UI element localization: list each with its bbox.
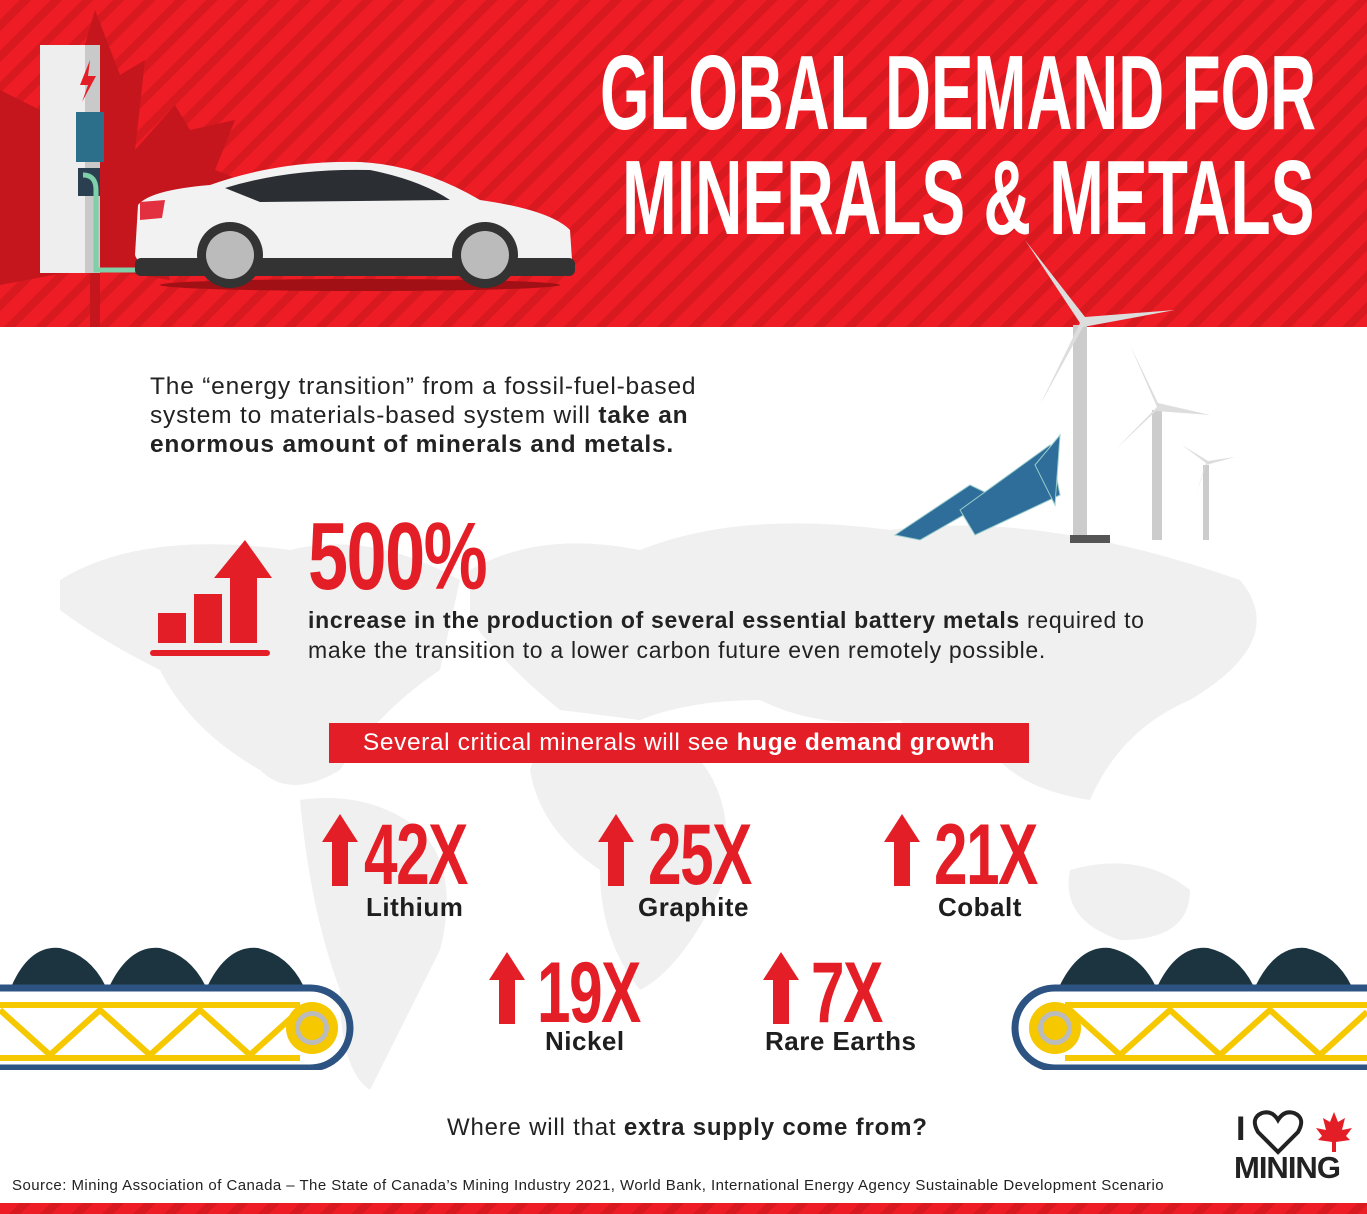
closing question: Where will that extra supply come from? (447, 1114, 928, 1141)
logo: I love mining (1234, 1110, 1352, 1185)
icon: charging station (40, 45, 136, 273)
footer band (0, 1203, 1367, 1214)
banner (329, 723, 1029, 763)
icon: rising bar chart (150, 540, 272, 656)
logo: I love mining: MINING (1234, 1150, 1340, 1185)
conveyor left (0, 948, 354, 1070)
icon: electric car (135, 162, 575, 291)
mineral: rare earths (763, 945, 916, 1056)
mineral: lithium: Lithium (366, 892, 463, 922)
mineral: nickel: Nickel (545, 1026, 625, 1056)
title: MINERALS & METALS (622, 139, 1314, 257)
mineral: cobalt (884, 807, 1038, 922)
mineral: rare earths: Rare Earths (765, 1026, 916, 1056)
conveyor right (1012, 948, 1367, 1070)
mineral: rare earths: 7X (811, 945, 882, 1041)
mineral: nickel: 19X (537, 945, 640, 1041)
world map (60, 524, 1256, 1090)
mineral: lithium: 42X (364, 807, 467, 903)
header band (0, 0, 1367, 327)
mineral: cobalt: Cobalt (938, 892, 1022, 922)
mineral: graphite (598, 807, 752, 922)
icon: solar panels and wind turbines (894, 240, 1234, 543)
stat description: increase in the production of several essential battery metals required to make the transition to a lower carbon future even remotely possible. (308, 607, 1145, 663)
mineral: nickel (489, 945, 641, 1056)
banner: Several critical minerals will see huge demand growth (363, 729, 995, 756)
mineral: graphite: Graphite (638, 892, 749, 922)
maple leaf (0, 10, 235, 327)
stat 500%: 500% (308, 503, 486, 610)
logo: I love mining: I (1236, 1110, 1245, 1148)
mineral: lithium (322, 807, 468, 922)
source: Source: Mining Association of Canada – The State of Canada’s Mining Industry 2021, World Bank, International Energy Agency Sustainable Development Scenario (12, 1177, 1164, 1194)
mineral: cobalt: 21X (934, 807, 1037, 903)
mineral: graphite: 25X (648, 807, 751, 903)
intro text: The “energy transition” from a fossil-fuel-based system to materials-based system will take an enormous amount of minerals and metals. (150, 373, 696, 458)
title: GLOBAL DEMAND FOR (600, 34, 1316, 152)
title (600, 34, 1316, 257)
